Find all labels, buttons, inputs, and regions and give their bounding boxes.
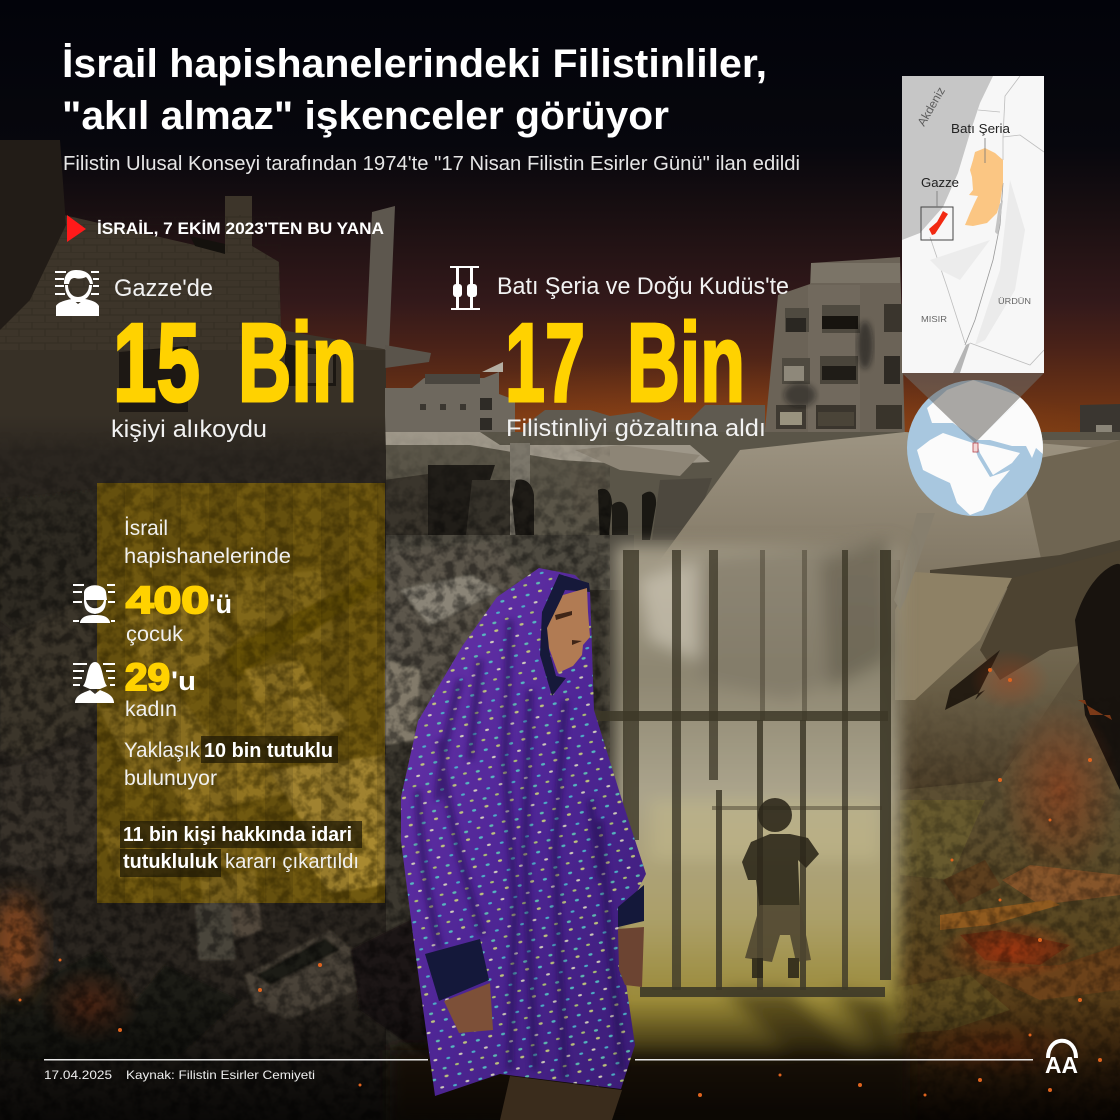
map labels: MISIR xyxy=(921,314,947,324)
number xyxy=(505,301,745,425)
apartment block on the right xyxy=(764,257,905,440)
cuff right xyxy=(618,885,644,927)
sea xyxy=(902,76,993,240)
globe xyxy=(902,373,1044,516)
label: Gazze'de xyxy=(114,275,213,302)
gate background scene xyxy=(390,540,910,1120)
tent camp xyxy=(384,432,1120,802)
Europe xyxy=(927,380,1023,440)
stat: women xyxy=(73,657,196,721)
stat: Gaza xyxy=(55,270,357,443)
wedge connecting map to globe xyxy=(902,373,1044,443)
cuff left xyxy=(425,939,489,1001)
bombed building on the left xyxy=(0,140,431,520)
Arabia xyxy=(977,443,1020,475)
map labels: Akdeniz xyxy=(914,85,948,128)
text: ten thousand detainees: Yaklaşık xyxy=(124,739,200,762)
caption: kişiyi alıkoydu xyxy=(111,416,267,443)
stat: West Bank xyxy=(450,266,789,442)
West Bank xyxy=(965,148,1003,226)
ember sparks xyxy=(18,668,1102,1097)
child silhouette xyxy=(742,798,819,978)
caption: kadın xyxy=(125,698,177,721)
icon: woman xyxy=(73,662,115,703)
number xyxy=(113,301,357,425)
number: 400 xyxy=(126,580,209,622)
map labels xyxy=(914,85,1031,324)
Africa xyxy=(917,433,1010,515)
map labels: Gazze xyxy=(921,175,959,190)
legs xyxy=(500,1076,622,1120)
far right building xyxy=(1080,404,1120,460)
map inset xyxy=(902,76,1044,373)
caption: Filistinliyi gözaltına aldı xyxy=(506,415,766,442)
number: Bin xyxy=(238,301,357,425)
Gaza locator box xyxy=(921,207,953,240)
Gaza xyxy=(929,211,948,235)
text: ten thousand detainees: 10 bin tutuklu xyxy=(204,740,333,762)
bottom fade xyxy=(0,1000,1120,1120)
section marker: İSRAİL, 7 EKİM 2023'TEN BU YANA xyxy=(97,219,384,238)
head scarf xyxy=(540,574,590,696)
suffix: 'u xyxy=(171,666,196,696)
title xyxy=(62,42,767,138)
distant grey building xyxy=(385,362,765,470)
number: 29 xyxy=(125,657,170,699)
number: 15 xyxy=(113,301,200,425)
icon: detainee xyxy=(55,270,99,316)
subtitle: Filistin Ulusal Konseyi tarafından 1974'te "17 Nisan Filistin Esirler Günü" ilan edildi xyxy=(63,153,800,175)
gate bars xyxy=(590,550,891,997)
text: administrative detention: 11 bin kişi hakkında idari xyxy=(123,824,352,846)
footer: 17.04.2025 xyxy=(44,1068,112,1082)
label: Batı Şeria ve Doğu Kudüs'te xyxy=(497,273,789,300)
logo: AA xyxy=(1045,1052,1078,1078)
logo xyxy=(1045,1041,1078,1078)
text: ten thousand detainees: bulunuyor xyxy=(124,767,217,790)
terrain and borders xyxy=(930,76,1044,365)
panel text: prisons: hapishanelerinde xyxy=(124,545,291,568)
footer: Kaynak: Filistin Esirler Cemiyeti xyxy=(126,1068,315,1082)
section marker xyxy=(67,215,384,242)
text: administrative detention xyxy=(120,821,362,877)
text: administrative detention: kararı çıkartıldı xyxy=(225,851,359,873)
title: "akıl almaz" işkenceler görüyor xyxy=(62,94,669,138)
title: İsrail hapishanelerindeki Filistinliler, xyxy=(62,42,767,86)
panel text: prisons xyxy=(124,517,291,568)
icon: child xyxy=(73,584,115,623)
panel text: prisons: İsrail xyxy=(124,517,168,540)
woman in purple dress xyxy=(401,568,646,1120)
Asia xyxy=(977,397,1044,458)
ground rubble on the right xyxy=(896,656,1120,1086)
map labels: ÜRDÜN xyxy=(998,296,1031,306)
text: administrative detention: tutukluluk xyxy=(123,851,219,873)
text: ten thousand detainees xyxy=(124,736,338,790)
hand right xyxy=(618,927,644,987)
footer xyxy=(44,1059,1033,1082)
suffix: 'ü xyxy=(209,589,232,619)
large tent and right-hand ground xyxy=(660,432,1120,1120)
dress pattern and folds xyxy=(401,568,646,1096)
yellow translucent panel xyxy=(97,483,385,903)
map labels: Batı Şeria xyxy=(951,121,1011,136)
locator box xyxy=(973,443,978,452)
number: Bin xyxy=(627,301,745,425)
rubble under the yellow panel xyxy=(0,415,625,1120)
face xyxy=(547,588,590,673)
stat: children xyxy=(73,580,232,646)
caption: çocuk xyxy=(126,623,184,646)
icon: hands on bars xyxy=(450,266,480,310)
hand left xyxy=(444,983,493,1033)
number: 17 xyxy=(505,301,585,425)
